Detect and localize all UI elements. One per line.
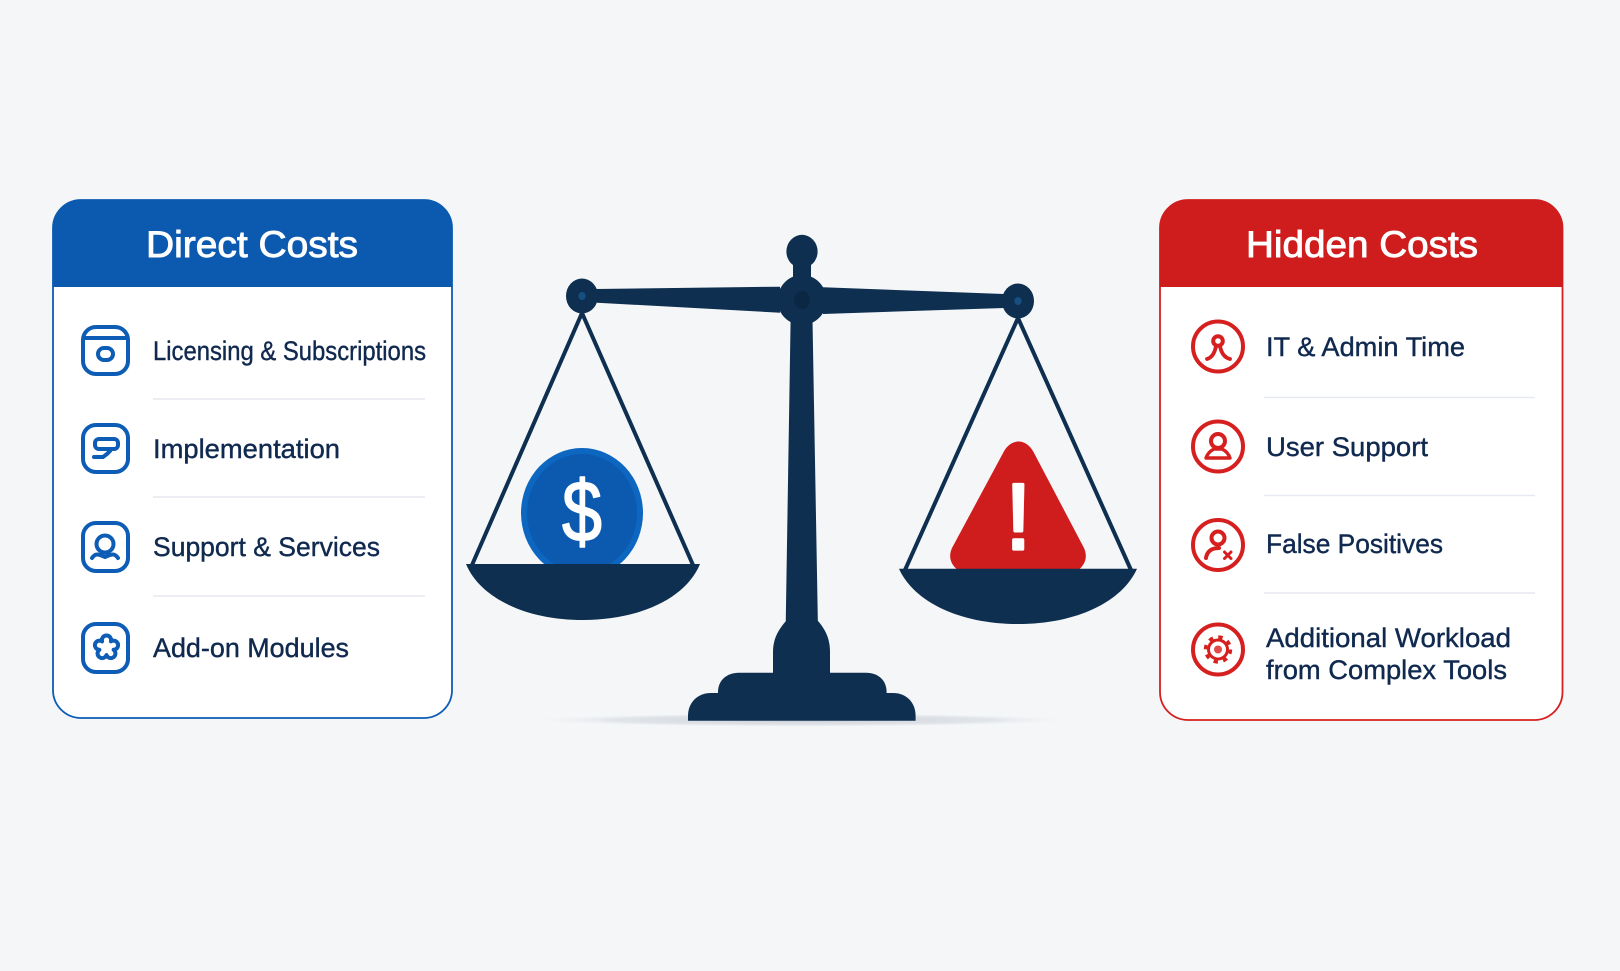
label: IT and admin time: IT & Admin Time xyxy=(1266,332,1465,362)
left pan xyxy=(466,564,700,620)
label: false positives: False Positives xyxy=(1266,529,1443,559)
label: implementation: Implementation xyxy=(153,434,340,464)
item: implementation xyxy=(83,425,340,472)
base lower step xyxy=(688,693,916,721)
panel header: hidden costs xyxy=(1160,200,1563,287)
exclamation mark: ! xyxy=(1005,464,1031,569)
label: additional workload xyxy=(1266,623,1511,685)
panel header: direct costs xyxy=(52,200,452,287)
item: additional workload xyxy=(1193,623,1511,685)
label: add-on modules: Add-on Modules xyxy=(153,633,349,663)
scale bell base xyxy=(773,621,830,675)
right pan cords xyxy=(905,318,1131,570)
label line one: Additional Workload xyxy=(1266,623,1511,653)
icon: IT admin person xyxy=(1193,322,1243,372)
label: support and services: Support & Services xyxy=(153,532,380,562)
item: user support xyxy=(1193,422,1429,472)
left beam knob xyxy=(566,278,598,314)
panel: hidden costs xyxy=(1160,200,1563,720)
base upper step xyxy=(718,673,887,694)
scale beam xyxy=(595,287,1004,314)
ground shadow xyxy=(527,713,1077,727)
icon: subscription box xyxy=(83,327,128,374)
item: support and services xyxy=(83,523,380,571)
right pan xyxy=(899,569,1137,624)
icon: user person xyxy=(1193,422,1243,472)
item: licensing and subscriptions xyxy=(83,327,426,374)
center hub xyxy=(778,275,826,325)
label line two: from Complex Tools xyxy=(1266,655,1507,685)
icon: gear xyxy=(1193,624,1243,674)
item: add-on modules xyxy=(83,624,349,672)
heading: direct costs: Direct Costs xyxy=(146,224,358,265)
icon: implementation chat xyxy=(83,425,128,472)
panel: direct costs xyxy=(52,200,452,718)
right beam knob xyxy=(1002,284,1034,318)
item: false positives xyxy=(1193,520,1443,570)
icon: person with cross xyxy=(1193,520,1243,570)
scale post xyxy=(786,320,818,625)
icon: support person xyxy=(83,523,128,571)
panel body: hidden costs xyxy=(1160,200,1562,720)
top knob xyxy=(786,235,818,285)
label: licensing and subscriptions: Licensing & Subscriptions xyxy=(153,336,426,366)
label: user support: User Support xyxy=(1266,432,1429,462)
icon: warning triangle xyxy=(950,442,1086,569)
item: IT and admin time xyxy=(1193,322,1465,372)
balance scale xyxy=(466,235,1137,727)
left pan cords xyxy=(472,313,693,565)
icon: add-on puzzle xyxy=(83,624,128,672)
panel body: direct costs xyxy=(53,200,452,718)
icon: dollar coin xyxy=(521,448,643,564)
dollar sign: $ xyxy=(562,464,602,560)
heading: hidden costs: Hidden Costs xyxy=(1246,224,1478,265)
infographic canvas xyxy=(52,199,1564,726)
